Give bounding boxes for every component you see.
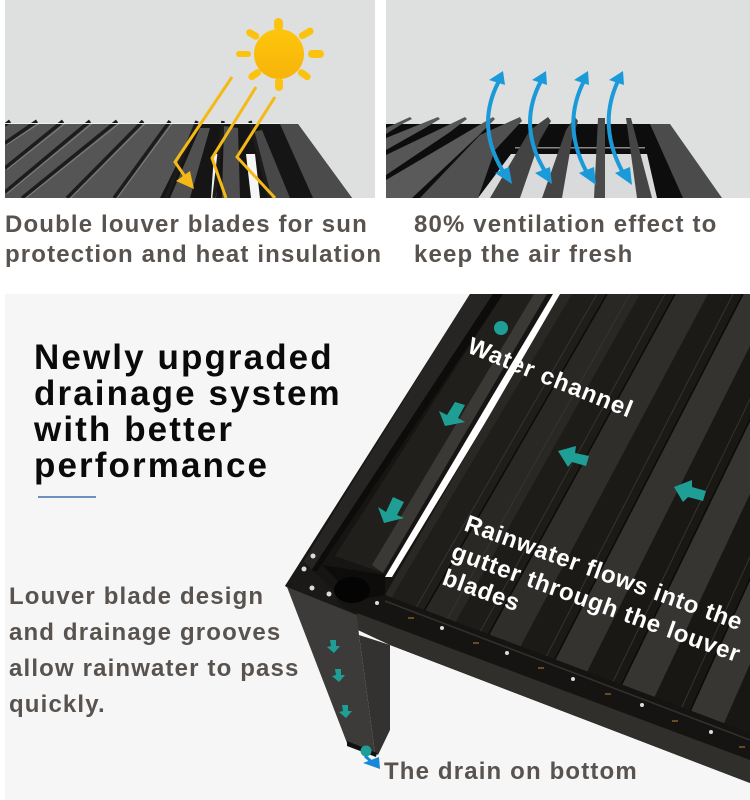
louver roof, sun panel bbox=[5, 121, 352, 200]
louver roof, ventilation panel bbox=[386, 117, 722, 198]
caption: ventilation bbox=[414, 214, 716, 267]
icon: drain outlet bbox=[360, 746, 380, 769]
screws bbox=[302, 554, 713, 734]
caption: sun protection: Double louver blades for sun bbox=[5, 211, 368, 238]
gutter rail bbox=[414, 606, 724, 724]
table leg bbox=[287, 587, 375, 753]
pergola frame and louver roof bbox=[285, 294, 750, 783]
label: water channel: Water channel bbox=[464, 333, 637, 424]
caption: ventilation: 80% ventilation effect top bbox=[414, 211, 733, 238]
roof louver bands bbox=[385, 294, 750, 723]
body text: quickly. bbox=[9, 691, 106, 718]
body text: allow rainwater to pass bbox=[9, 655, 300, 682]
label: rainwater line 1: Rainwater flows into the bbox=[461, 510, 746, 636]
corner drain opening bbox=[285, 562, 385, 603]
icon: sun bbox=[236, 18, 324, 91]
heading: performance bbox=[34, 446, 269, 485]
arrows: water flow bbox=[327, 402, 706, 718]
heading: Newly upgraded bbox=[34, 338, 334, 377]
panel: ventilation image bbox=[386, 0, 750, 198]
label: rainwater line 2: gutter through the louver bbox=[448, 538, 744, 668]
caption: sun protection: protection and heat insulation bbox=[5, 241, 382, 268]
body text: and drainage grooves bbox=[9, 619, 281, 646]
arrows: airflow bbox=[488, 71, 632, 185]
arrows: sun rays reflected by louvers bbox=[175, 77, 275, 198]
teal marker dot bbox=[494, 321, 508, 335]
body text: Louver blade design bbox=[9, 583, 264, 610]
beam face bbox=[357, 613, 750, 783]
divider accent bbox=[38, 496, 96, 498]
heading: with better bbox=[33, 410, 234, 449]
caption: ventilation: keep the air fresh bbox=[414, 241, 633, 268]
panel: drainage system bbox=[5, 294, 750, 800]
rail marks bbox=[408, 617, 745, 748]
label: rainwater line 3: blades bbox=[439, 564, 524, 617]
label: drain: The drain on bottom bbox=[384, 758, 638, 785]
panel: sun protection image bbox=[5, 0, 375, 200]
heading: drainage system bbox=[34, 374, 342, 413]
